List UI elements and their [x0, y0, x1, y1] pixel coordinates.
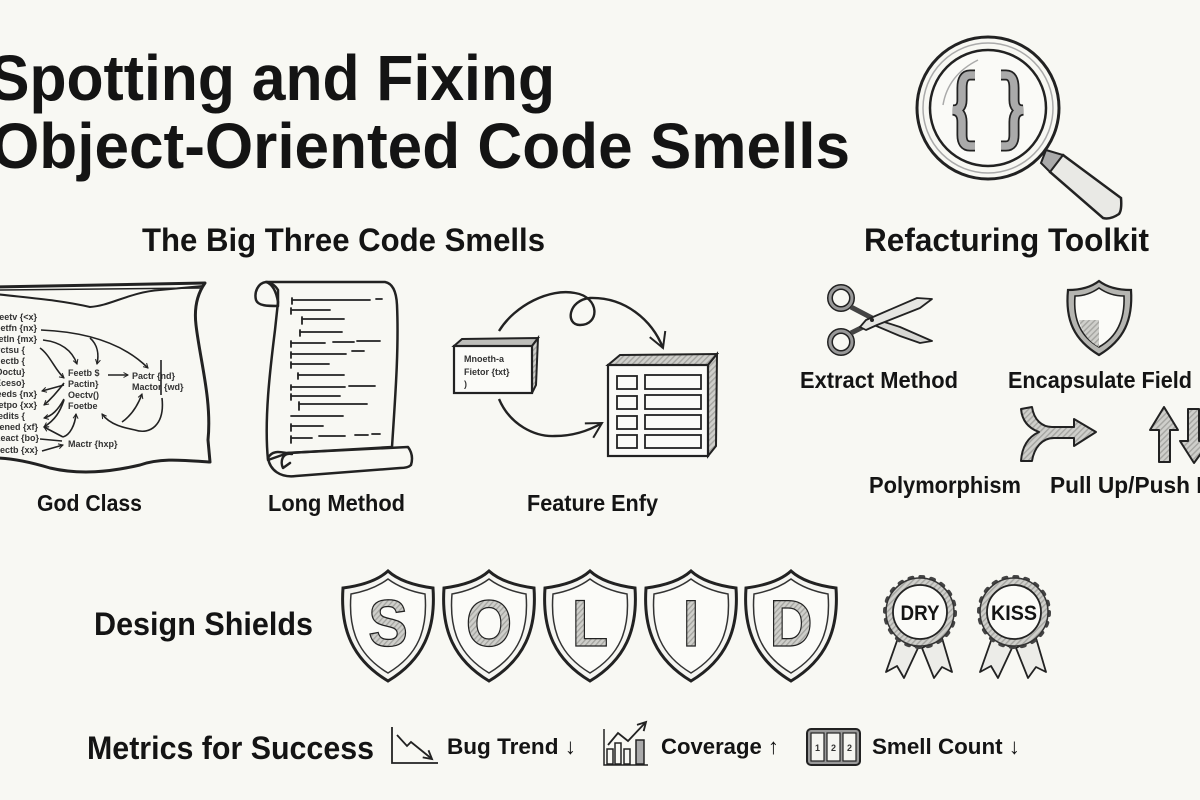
icon: polymorphism arrow [1021, 407, 1096, 461]
label: god class: God Class [37, 490, 142, 516]
badge: KISS [979, 577, 1049, 678]
title: Spotting and Fixing [0, 42, 555, 114]
panel: feature envy: ) [464, 379, 467, 389]
panel: god class: Mactor {wd} [132, 382, 184, 392]
shield: O [444, 571, 534, 681]
icon: smell counter: 2 [831, 743, 836, 753]
panel: god class: Oectv() [68, 390, 99, 400]
heading: metrics: Metrics for Success [87, 730, 374, 766]
badge: KISS: KISS [991, 602, 1037, 625]
icon: coverage chart [604, 722, 648, 765]
title: Object-Oriented Code Smells [0, 110, 850, 182]
panel: god class: Foetbe [68, 401, 98, 411]
shield: S [343, 571, 433, 681]
label: polymorphism: Polymorphism [869, 472, 1021, 498]
panel: god class [0, 283, 210, 472]
icon: magnifying glass with braces [917, 37, 1121, 218]
panel: god class: Pactr {nd} [132, 371, 176, 381]
icon: scissors [830, 287, 932, 353]
icon: smell counter: 1 [815, 743, 820, 753]
panel: feature envy: Fietor {txt} [464, 367, 510, 377]
panel: long method [255, 282, 412, 476]
panel: feature envy: Mnoeth-a [464, 354, 505, 364]
shield: L [545, 571, 635, 681]
badge: DRY: DRY [900, 602, 940, 625]
label: long method: Long Method [268, 490, 405, 516]
shield: D [746, 571, 836, 681]
label: encapsulate field: Encapsulate Field [1008, 367, 1192, 393]
icon: shield [1067, 281, 1131, 355]
panel: god class: Feetb $ [68, 368, 100, 378]
label: feature envy: Feature Enfy [527, 490, 658, 516]
badge: DRY [885, 577, 955, 678]
title [0, 42, 850, 182]
icon: push down arrow [1180, 409, 1200, 463]
shield: I: I [683, 587, 699, 661]
label: coverage: Coverage ↑ [661, 734, 779, 759]
panel: feature envy [454, 292, 717, 456]
heading: big three: The Big Three Code Smells [142, 222, 545, 258]
heading: toolkit: Refacturing Toolkit [864, 222, 1149, 258]
icon: bug trend chart [392, 727, 438, 763]
shield: O: O [466, 587, 512, 661]
icon: smell counter: 2 [847, 743, 852, 753]
panel: god class: Pactin} [68, 379, 99, 389]
shield: L: L [572, 587, 608, 661]
shield: D: D [770, 587, 812, 661]
icon: pull up arrow [1150, 407, 1178, 462]
label: bug trend: Bug Trend ↓ [447, 734, 576, 759]
panel: god class: Mactr {hxp} [68, 439, 118, 449]
heading: design shields: Design Shields [94, 606, 313, 642]
label: extract method: Extract Method [800, 367, 958, 393]
icon: smell counter [807, 729, 860, 765]
shield: I [646, 571, 736, 681]
shield: S: S [368, 587, 408, 661]
label: smell count: Smell Count ↓ [872, 734, 1020, 759]
